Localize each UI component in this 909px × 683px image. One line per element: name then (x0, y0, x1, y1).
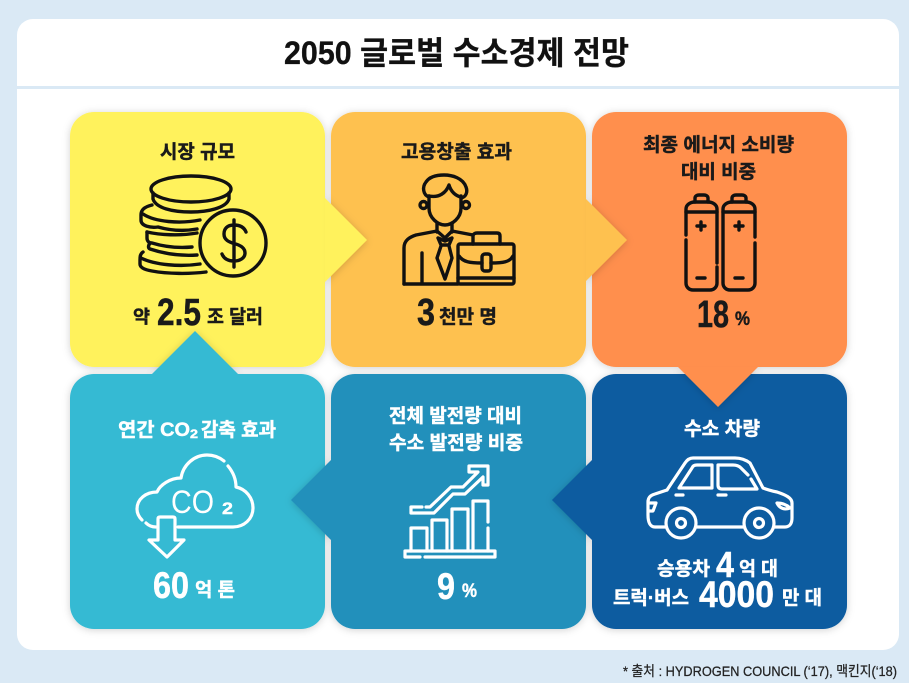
value: passenger cars: 억 대 (739, 558, 778, 580)
icon: batteries (686, 195, 755, 290)
value: passenger cars (657, 544, 778, 585)
value: hydrogen share of power generation: 9 (437, 566, 455, 607)
heading: hydrogen share of power generation: 수소 발전량 비중 (389, 432, 523, 454)
arrow: energy share to vehicles (678, 367, 758, 407)
panel: hydrogen share of power generation (331, 374, 586, 629)
value: trucks and buses: 4000 (699, 574, 774, 615)
heading: share of final energy consumption: 최종 에너지 소비량 (643, 134, 794, 156)
arrow: CO2 reduction to market size (152, 331, 238, 374)
icon: businessman with briefcase (404, 175, 514, 284)
panel: annual CO2 reduction (70, 374, 325, 629)
arrow: vehicles to power generation (552, 460, 592, 540)
heading: hydrogen share of power generation (389, 405, 523, 454)
icon: CO2 cloud with down arrow: 2 (222, 499, 233, 518)
icon: rising bar chart with arrow (405, 466, 495, 557)
value: annual CO2 reduction: 억 톤 (195, 579, 235, 601)
value: market size: 2.5 (157, 292, 201, 334)
icon: CO2 cloud with down arrow (137, 455, 253, 557)
heading: hydrogen vehicles: 수소 차량 (684, 418, 760, 440)
value: trucks and buses (613, 574, 822, 615)
panel: job creation (331, 112, 586, 367)
value: passenger cars: 4 (716, 544, 734, 585)
value: trucks and buses: 트럭·버스 (613, 587, 689, 609)
heading: annual CO2 reduction (118, 419, 276, 441)
value: market size: 약 (133, 307, 150, 327)
heading: annual CO2 reduction: 연간 CO (118, 419, 190, 441)
value: market size (133, 292, 263, 334)
value: share of final energy consumption: % (735, 309, 750, 330)
heading: annual CO2 reduction: 감축 효과 (201, 419, 276, 441)
heading: job creation: 고용창출 효과 (401, 141, 512, 163)
value: job creation (417, 292, 497, 334)
value: trucks and buses: 만 대 (782, 587, 822, 609)
value: job creation: 천만 명 (439, 306, 497, 328)
heading: annual CO2 reduction: 2 (190, 427, 198, 441)
panel: market size (70, 112, 325, 367)
heading: market size: 시장 규모 (160, 141, 235, 163)
value: market size: 조 달러 (207, 306, 263, 328)
title: 2050 글로벌 수소경제 전망 (284, 35, 629, 71)
heading: share of final energy consumption (643, 134, 794, 183)
value: annual CO2 reduction: 60 (153, 565, 189, 606)
value: share of final energy consumption: 18 (697, 294, 729, 336)
value: passenger cars: 승용차 (657, 558, 711, 580)
heading: hydrogen share of power generation: 전체 발전량 대비 (389, 405, 522, 427)
arrow: market size to jobs (325, 198, 367, 282)
panel: hydrogen vehicles (592, 374, 847, 629)
icon: CO2 cloud with down arrow: CO (171, 484, 214, 520)
panel: share of final energy consumption (592, 112, 847, 367)
value: hydrogen share of power generation: % (462, 581, 477, 602)
icon: coins with dollar (140, 176, 266, 276)
value: annual CO2 reduction (153, 565, 235, 606)
icon: car (648, 458, 792, 538)
arrow: jobs to energy share (586, 199, 627, 281)
arrow: power generation to CO2 reduction (291, 460, 331, 540)
value: hydrogen share of power generation (437, 566, 477, 607)
value: job creation: 3 (417, 292, 435, 334)
heading: share of final energy consumption: 대비 비중 (681, 161, 756, 183)
